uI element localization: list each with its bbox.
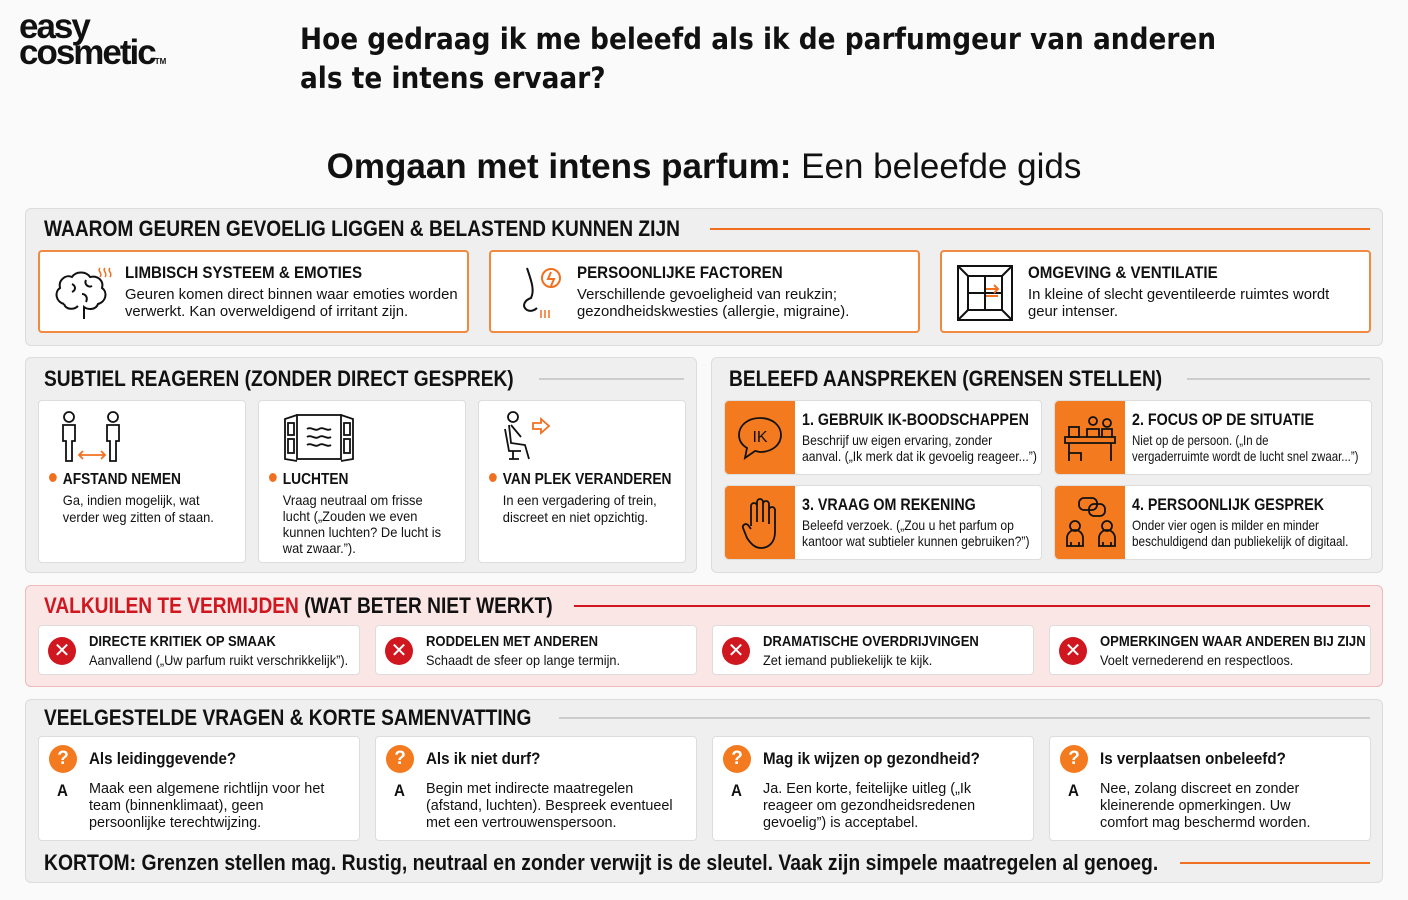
card: roddelen (375, 625, 697, 675)
icon: conversation (1066, 497, 1116, 547)
icon: nose (523, 268, 561, 318)
faq 3: Ja. Een korte, feitelijke uitleg („Ik (763, 780, 971, 797)
card 3: 3. VRAAG OM REKENING (802, 495, 976, 514)
logo: cosmeticTM (19, 33, 166, 72)
faq 4: ? (1068, 748, 1080, 769)
card: opmerkingen: ✕ (1065, 640, 1081, 662)
panel: faq (25, 699, 1383, 883)
card: persoonlijke factoren: gezondheidskwesties (allergie, migraine). (577, 303, 849, 320)
card: omgeving: OMGEVING & VENTILATIE (1028, 263, 1218, 282)
card: luchten: Vraag neutraal om frisse (283, 492, 423, 508)
faq 4 (1049, 736, 1371, 841)
faq 4: Nee, zolang discreet en zonder (1100, 780, 1299, 797)
card 4: Onder vier ogen is milder en minder (1132, 517, 1319, 533)
card: omgeving (940, 250, 1371, 333)
card 4 (1054, 485, 1372, 560)
faq 4: A (1068, 781, 1079, 800)
faq 1: ? (57, 748, 69, 769)
faq 3: reageer om gezondheidsredenen (763, 797, 975, 814)
card 3 (724, 485, 1042, 560)
card 3: Beleefd verzoek. („Zou u het parfum op (802, 517, 1014, 533)
card: persoonlijke factoren: Verschillende gevoeligheid van reukzin; (577, 286, 837, 303)
faq 2: ? (394, 748, 406, 769)
faq 1: A (57, 781, 68, 800)
card: afstand: Ga, indien mogelijk, wat (63, 492, 200, 508)
card 1 (724, 400, 1042, 475)
card: luchten (258, 400, 466, 563)
card 4: 4. PERSOONLIJK GESPREK (1132, 495, 1324, 514)
card: afstand (38, 400, 246, 563)
summary: KORTOM: Grenzen stellen mag. Rustig, neutraal en zonder verwijt is de sleutel. Vaak zijn simpele maatregelen al genoeg. (44, 850, 1158, 875)
card: dramatisch (712, 625, 1034, 675)
card: persoonlijke factoren (489, 250, 920, 333)
faq 2: (afstand, luchten). Bespreek eventueel (426, 797, 673, 814)
card: limbisch: LIMBISCH SYSTEEM & EMOTIES (125, 263, 362, 282)
faq 3: ? (731, 748, 743, 769)
page title: Hoe gedraag ik me beleefd als ik de parfumgeur van anderen (300, 22, 1216, 56)
heading: VALKUILEN TE VERMIJDEN (WAT BETER NIET WERKT) (44, 593, 553, 618)
card: roddelen: ✕ (391, 640, 407, 662)
heading: BELEEFD AANSPREKEN (GRENSEN STELLEN) (729, 366, 1162, 391)
faq 2: met een vertrouwenspersoon. (426, 814, 617, 831)
card: opmerkingen: OPMERKINGEN WAAR ANDEREN BIJ ZIJN (1100, 633, 1366, 650)
icon: hand (742, 498, 776, 549)
card: van plek (478, 400, 686, 563)
card: dramatisch: Zet iemand publiekelijk te kijk. (763, 652, 932, 668)
faq 2: Als ik niet durf? (426, 749, 540, 768)
faq 3 (712, 736, 1034, 841)
faq 1: Maak een algemene richtlijn voor het (89, 780, 324, 797)
faq 1: team (binnenklimaat), geen (89, 797, 263, 814)
card 2 (1054, 400, 1372, 475)
card: dramatisch: ✕ (728, 640, 744, 662)
icon: IK bubble (738, 417, 782, 460)
card: roddelen: RODDELEN MET ANDEREN (426, 633, 598, 650)
logo: easy (19, 7, 89, 46)
faq 1 (38, 736, 360, 841)
panel: subtiel reageren (25, 357, 697, 573)
faq 1: persoonlijke terechtwijzing. (89, 814, 261, 831)
heading: SUBTIEL REAGEREN (ZONDER DIRECT GESPREK) (44, 366, 514, 391)
card: limbisch: Geuren komen direct binnen waar emoties worden (125, 286, 458, 303)
faq 3: Mag ik wijzen op gezondheid? (763, 749, 980, 768)
icon: open window (284, 414, 354, 462)
logo (19, 7, 166, 72)
card: roddelen: Schaadt de sfeer op lange termijn. (426, 652, 620, 668)
card: omgeving: geur intenser. (1028, 303, 1118, 320)
card: kritiek (38, 625, 360, 675)
heading: WAAROM GEUREN GEVOELIG LIGGEN & BELASTEND KUNNEN ZIJN (44, 216, 680, 241)
card: luchten: wat zwaar.”). (283, 540, 356, 556)
panel: why (25, 208, 1383, 346)
card: afstand: verder weg zitten of staan. (63, 509, 214, 525)
card 4: beschuldigend dan publiekelijk of digitaal. (1132, 533, 1348, 549)
icon: brain (56, 268, 112, 319)
faq 3: gevoelig”) is acceptabel. (763, 814, 918, 831)
subtitle: Omgaan met intens parfum: Een beleefde gids (327, 147, 1081, 186)
card: omgeving: In kleine of slecht geventileerde ruimtes wordt (1028, 286, 1329, 303)
faq 1: Als leidinggevende? (89, 749, 236, 768)
faq 2 (375, 736, 697, 841)
card 3: kantoor wat subtieler kunnen gebruiken?”) (802, 533, 1030, 549)
icon: window room (957, 265, 1013, 321)
card: kritiek: ✕ (54, 640, 70, 662)
faq 4: comfort mag beschermd worden. (1100, 814, 1310, 831)
card: luchten: lucht („Zouden we even (283, 508, 417, 524)
icon: two persons (62, 411, 120, 462)
card: persoonlijke factoren: PERSOONLIJKE FACTOREN (577, 263, 783, 282)
icon: IK bubble: IK (752, 429, 768, 446)
card: afstand: AFSTAND NEMEN (63, 471, 181, 488)
card: luchten: LUCHTEN (283, 471, 348, 488)
card 2: vergaderruimte wordt de lucht snel zwaar...”) (1132, 448, 1359, 464)
card: van plek: VAN PLEK VERANDEREN (503, 471, 671, 488)
card: van plek: discreet en niet opzichtig. (503, 509, 648, 525)
card: luchten: kunnen luchten? De lucht is (283, 524, 441, 540)
card 2: 2. FOCUS OP DE SITUATIE (1132, 410, 1314, 429)
card: opmerkingen (1049, 625, 1371, 675)
card 1: aanval. („Ik merk dat ik gevoelig reageer...”) (802, 448, 1037, 464)
card: van plek: In een vergadering of trein, (503, 492, 657, 508)
page title: als te intens ervaar? (300, 61, 606, 95)
card: limbisch (38, 250, 469, 333)
card: kritiek: Aanvallend („Uw parfum ruikt verschrikkelijk”). (89, 652, 348, 668)
page title (300, 22, 1216, 95)
faq 2: Begin met indirecte maatregelen (426, 780, 633, 797)
card 1: 1. GEBRUIK IK-BOODSCHAPPEN (802, 410, 1029, 429)
faq 4: Is verplaatsen onbeleefd? (1100, 749, 1286, 768)
card: dramatisch: DRAMATISCHE OVERDRIJVINGEN (763, 633, 979, 650)
faq 3: A (731, 781, 742, 800)
card: opmerkingen: Voelt vernederend en respectloos. (1100, 652, 1293, 668)
panel: valkuilen (25, 585, 1383, 687)
card: limbisch: verwerkt. Kan overweldigend of irritant zijn. (125, 303, 408, 320)
faq 4: kleinerende opmerkingen. Uw (1100, 797, 1291, 814)
heading: VEELGESTELDE VRAGEN & KORTE SAMENVATTING (44, 705, 531, 730)
card 2: Niet op de persoon. („In de (1132, 432, 1269, 448)
icon: desk (1064, 416, 1116, 461)
card 1: Beschrijf uw eigen ervaring, zonder (802, 432, 992, 448)
icon: seated person arrow (504, 411, 550, 460)
panel: beleefd aanspreken (711, 357, 1383, 573)
card: kritiek: DIRECTE KRITIEK OP SMAAK (89, 633, 276, 650)
faq 2: A (394, 781, 405, 800)
